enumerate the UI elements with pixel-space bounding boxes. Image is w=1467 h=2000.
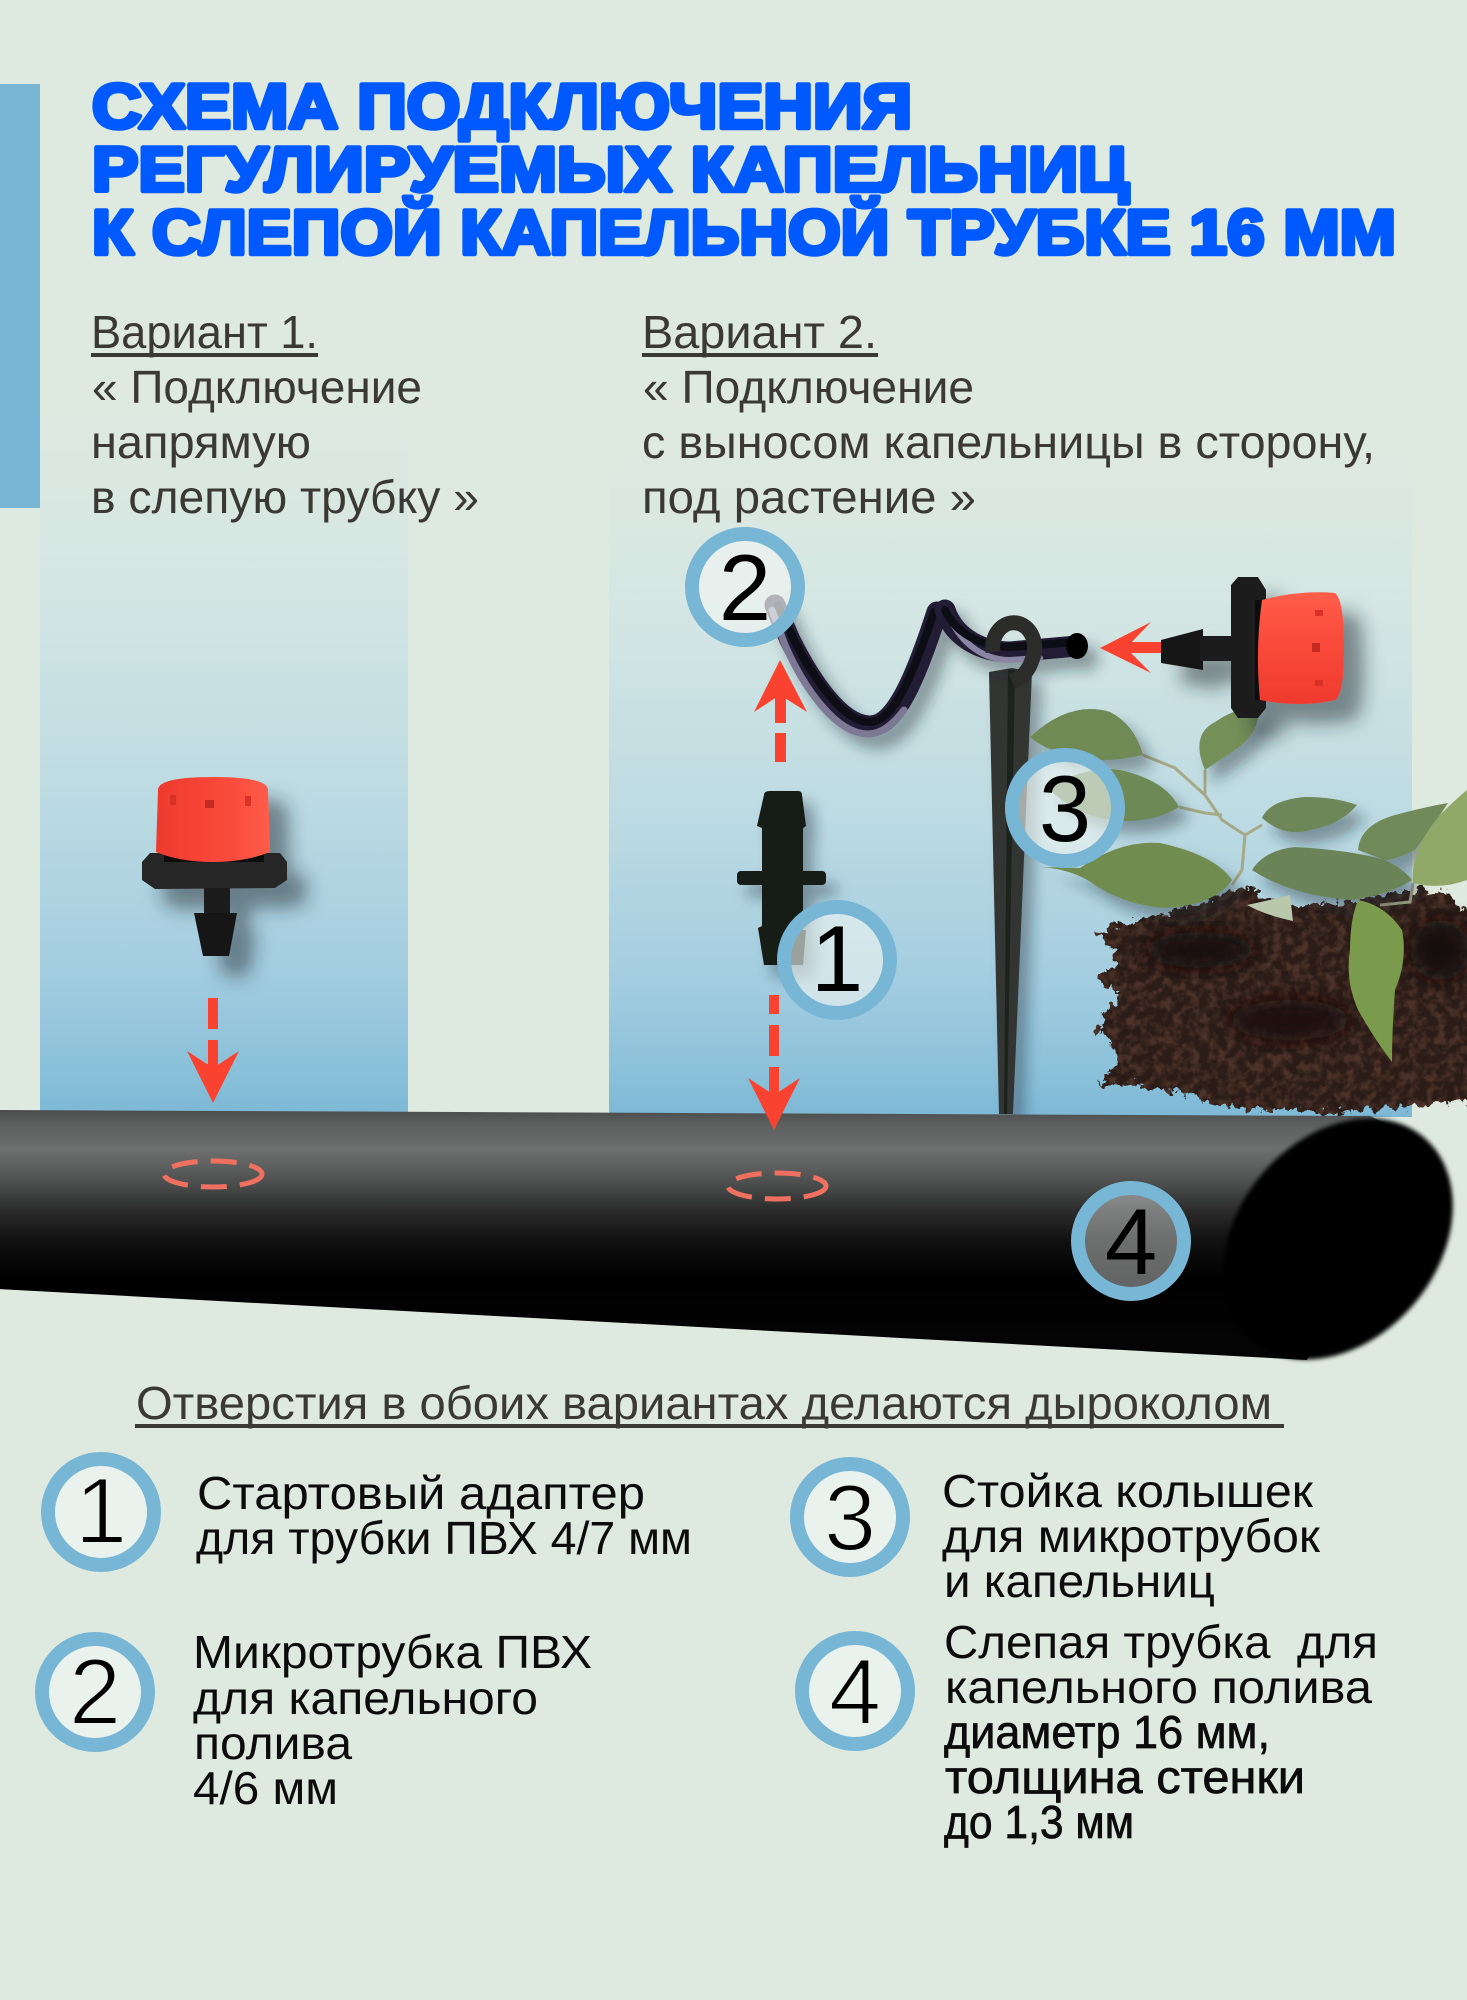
pipe: blind tube: [0, 1073, 1467, 1405]
leaf 10: [1247, 895, 1293, 921]
text block: variant 2: с выносом капельницы в сторону,: [642, 416, 1375, 468]
legend item 2: [42, 1626, 592, 1814]
text block: variant 1: в слепую трубку »: [91, 471, 479, 523]
text block: variant 1: Вариант 1.: [91, 306, 318, 358]
legend item 4: диаметр 16 мм,: [944, 1706, 1270, 1758]
text block: variant 2: под растение »: [642, 471, 976, 523]
legend badge 3: [797, 1464, 903, 1570]
arrow: left to microtube end: [1100, 622, 1162, 673]
legend item 3: Стойка колышек: [942, 1465, 1314, 1517]
legend item 4: капельного полива: [945, 1661, 1372, 1713]
callout 3: [1012, 755, 1118, 861]
panel: variant 1 backdrop: [40, 405, 408, 1113]
legend item 1: для трубки ПВХ 4/7 мм: [196, 1512, 692, 1564]
callout 4: [1078, 1188, 1184, 1294]
stake clip: [993, 623, 1035, 682]
stake: [989, 668, 1032, 1114]
icon: dripper variant 2: [1161, 577, 1344, 718]
legend badge 4: 4: [829, 1639, 881, 1744]
accent bar: [0, 84, 40, 508]
legend item 3: для микротрубок: [942, 1510, 1321, 1562]
leaf 7: [1358, 803, 1448, 860]
soil: [1097, 887, 1467, 1112]
leaf 4: [1199, 709, 1258, 770]
legend item 4: Слепая трубка для: [944, 1616, 1378, 1668]
callout 1: [784, 906, 890, 1013]
icon: dripper variant 1: [142, 777, 287, 956]
text block: variant 2: « Подключение: [643, 361, 974, 413]
legend item 4: до 1,3 мм: [944, 1796, 1134, 1848]
legend item 2: для капельного: [193, 1672, 538, 1724]
legend badge 4: [802, 1638, 908, 1744]
callout 1: 1: [811, 906, 863, 1011]
legend badge 1: 1: [75, 1458, 127, 1563]
callout 4: 4: [1105, 1189, 1157, 1294]
pipe open end: [1176, 1073, 1467, 1405]
legend item 2: 4/6 мм: [193, 1762, 338, 1814]
note heading: Отверстия в обоих вариантах делаются дыроколом: [136, 1377, 1272, 1429]
text block: variant 2: [642, 306, 1375, 523]
title: [92, 72, 1396, 268]
leaf 9: [1349, 900, 1404, 1062]
title: К СЛЕПОЙ КАПЕЛЬНОЙ ТРУБКЕ 16 ММ: [92, 197, 1396, 268]
legend item 4: толщина стенки: [945, 1751, 1305, 1803]
title: РЕГУЛИРУЕМЫХ КАПЕЛЬНИЦ: [92, 135, 1129, 205]
text block: variant 1: « Подключение: [92, 361, 422, 413]
microtube: [772, 605, 1088, 734]
leaf 2: [1047, 769, 1179, 821]
leaf 3: [1042, 843, 1232, 908]
leaf 5: [1262, 797, 1357, 832]
stems: [1143, 755, 1413, 905]
legend badge 2: 2: [69, 1639, 121, 1744]
text block: variant 1: напрямую: [91, 416, 311, 468]
icon: adapter: [737, 791, 826, 965]
arrow: down to hole 2: [748, 995, 800, 1130]
legend item 2: полива: [194, 1717, 352, 1769]
arrow: up to microtube: [754, 660, 807, 762]
legend item 2: Микротрубка ПВХ: [193, 1626, 592, 1678]
legend item 3: [797, 1464, 1321, 1607]
leaf 8: [1413, 790, 1467, 886]
arrow: down to hole 1: [187, 998, 239, 1103]
hole marker 1: [164, 1161, 262, 1187]
plant: [1030, 709, 1467, 1112]
leaf 6: [1252, 847, 1412, 900]
callout 3: 3: [1039, 756, 1091, 861]
hole marker 2: [728, 1173, 826, 1199]
legend badge 1: [48, 1458, 154, 1565]
title: СХЕМА ПОДКЛЮЧЕНИЯ: [92, 72, 912, 142]
legend item 4: [802, 1616, 1378, 1848]
leaf 1: [1030, 709, 1143, 760]
legend badge 2: [42, 1639, 148, 1745]
legend badge 3: 3: [824, 1465, 876, 1570]
legend item 1: [48, 1458, 692, 1565]
legend item 3: и капельниц: [944, 1555, 1215, 1607]
text block: variant 1: [91, 306, 479, 523]
callout 2: [692, 534, 798, 640]
text block: variant 2: Вариант 2.: [642, 306, 877, 358]
legend item 1: Стартовый адаптер: [197, 1467, 645, 1519]
callout 2: 2: [719, 535, 771, 640]
panel: variant 2 backdrop: [609, 445, 1412, 1117]
